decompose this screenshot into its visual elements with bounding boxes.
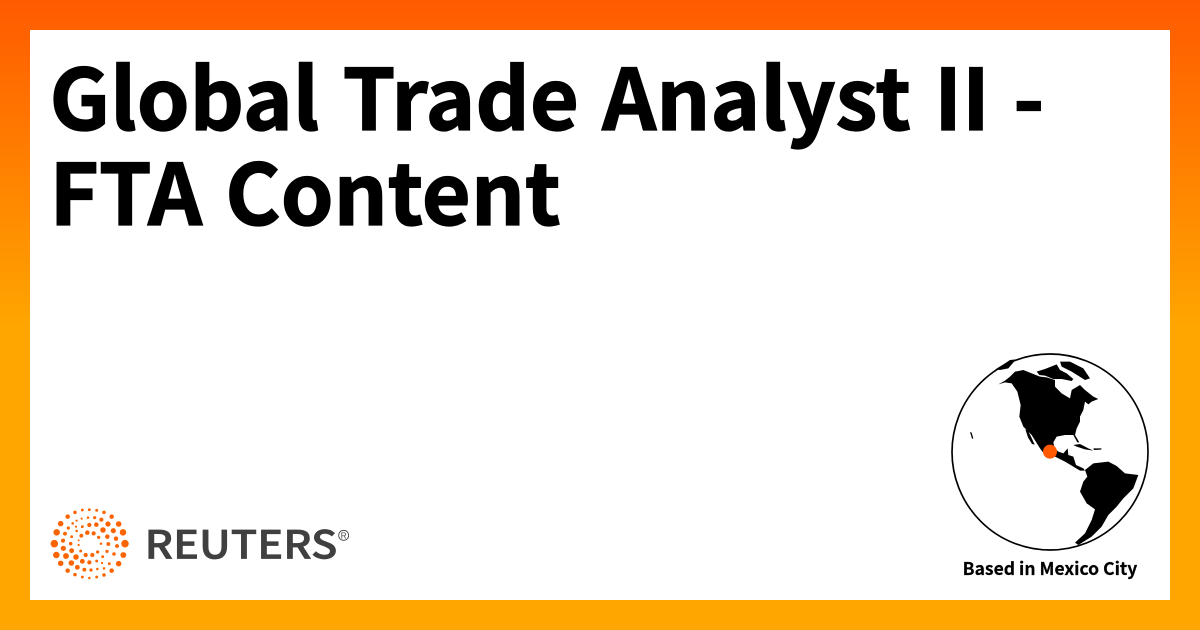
landmass: Arctic islands xyxy=(1037,364,1073,381)
registered mark: R xyxy=(341,531,347,540)
globe outline xyxy=(952,354,1148,550)
wordmark: REUTERS: REUTERS xyxy=(145,514,337,570)
landmass: Hawaii xyxy=(970,432,973,439)
landmass: North and Central America xyxy=(998,370,1098,471)
marker: Mexico City xyxy=(1043,445,1057,459)
title: Global Trade Analyst II - xyxy=(50,33,1044,155)
landmass: eastern Russia xyxy=(995,359,1016,370)
location label: Based in Mexico City xyxy=(963,556,1137,581)
registered mark xyxy=(339,530,349,540)
title xyxy=(50,33,1044,250)
landmass: Cuba and Hispaniola xyxy=(1073,444,1102,451)
logo: Reuters xyxy=(50,508,350,580)
landmass: Greenland xyxy=(1060,362,1090,380)
landmass: Baja California xyxy=(1025,429,1035,445)
title: FTA Content xyxy=(50,128,561,250)
map: globe centred on the Americas xyxy=(951,353,1149,551)
icon: Reuters dot sphere xyxy=(51,508,129,579)
landmass: South America xyxy=(1075,462,1138,545)
